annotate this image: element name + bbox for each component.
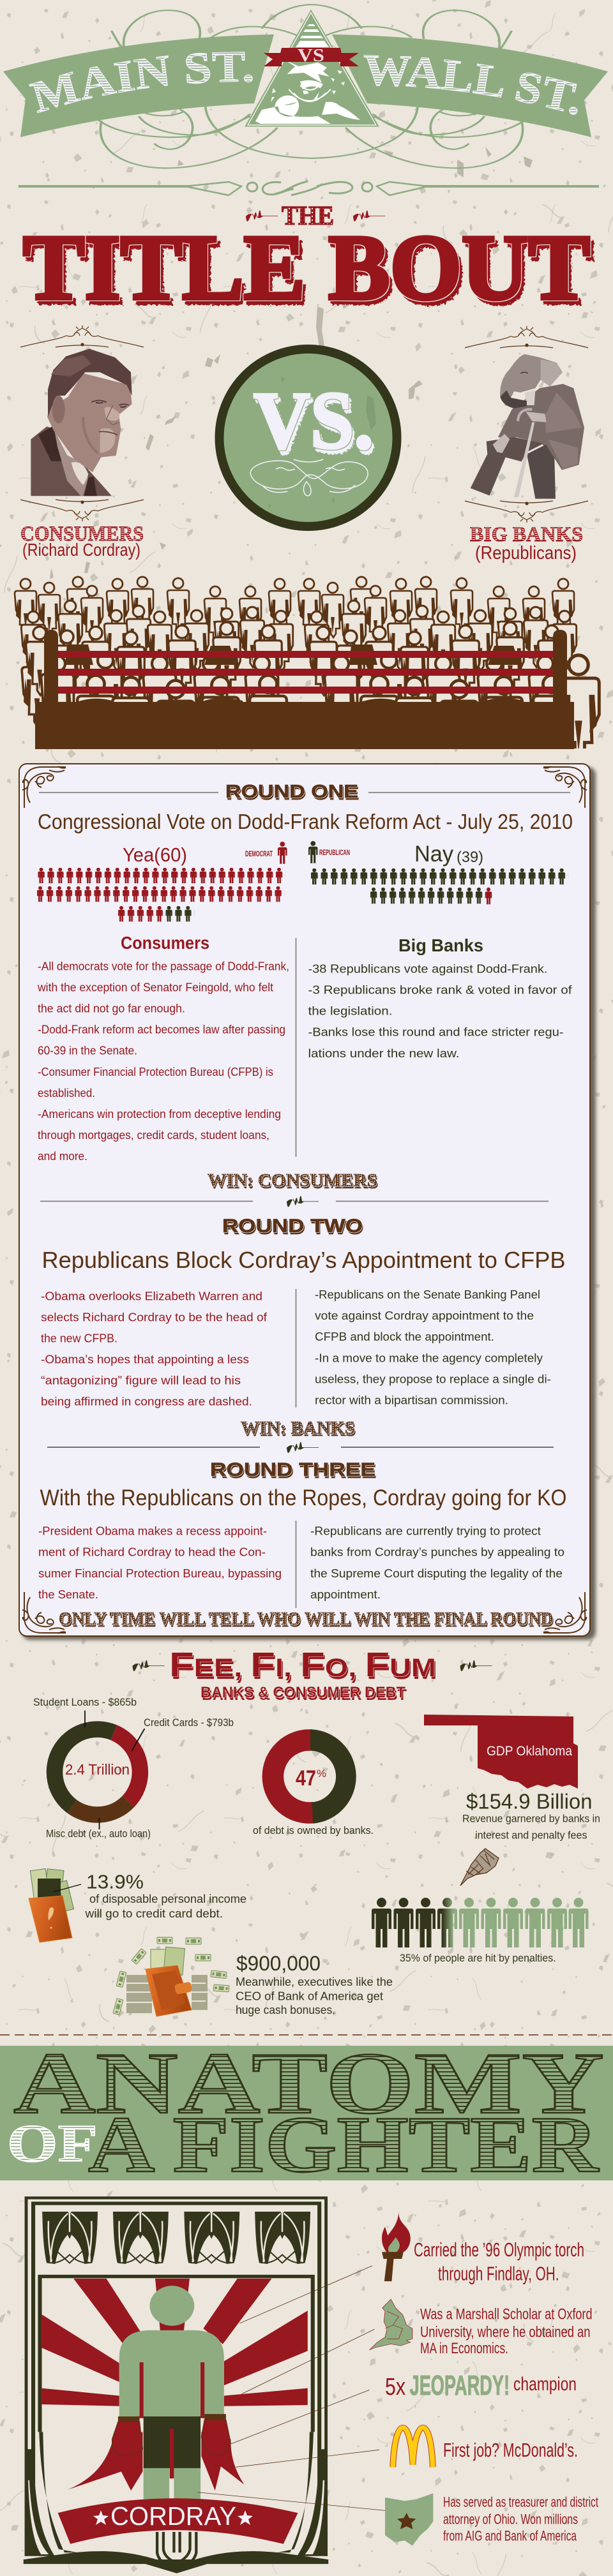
- 13.9 value: 13.9%: [86, 1871, 144, 1893]
- caption: [84, 1893, 246, 1920]
- flourish: [250, 459, 368, 496]
- left ribbon: [3, 34, 274, 137]
- header: Main St. vs Wall St. banner: [3, 4, 608, 168]
- poster frame: [26, 2198, 326, 2556]
- consumers text: selects Richard Cordray to be the head of: [41, 1311, 268, 1323]
- consumers text: being affirmed in congress are dashed.: [41, 1396, 252, 1408]
- revenue caption: interest and penalty fees: [475, 1829, 587, 1842]
- crowd of spectators: [14, 576, 601, 748]
- consumers text: -Obama’s hopes that appointing a less: [41, 1353, 249, 1366]
- consumers text: “antagonizing” figure will lead to his: [41, 1374, 241, 1387]
- oxford text: [420, 2306, 593, 2357]
- republican legend: REPUBLICAN: [319, 848, 350, 857]
- caption: CEO of Bank of America get: [236, 1990, 383, 2003]
- credit cards label: Credit Cards - $793b: [144, 1716, 234, 1729]
- caption: of debt is owned by banks.: [253, 1824, 374, 1836]
- consumers text: [41, 1290, 268, 1408]
- corner ornaments: [22, 766, 587, 1634]
- icon: torch: [382, 2212, 411, 2281]
- red rays: [41, 2279, 308, 2418]
- round three: [38, 1442, 567, 1629]
- percent sign: %: [317, 1768, 326, 1780]
- ornament top: [465, 326, 588, 348]
- win consumers: WIN: CONSUMERS: [208, 1170, 377, 1191]
- donut: 2.4 trillion debt: [33, 1696, 234, 1840]
- fighter: consumers: [20, 325, 144, 560]
- big banks text: -In a move to make the agency completely: [315, 1351, 543, 1364]
- big banks text: CFPB and block the appointment.: [315, 1330, 494, 1343]
- ropes: [58, 651, 553, 694]
- name big banks: BIG BANKS: [470, 523, 583, 546]
- fact: jeopardy: [385, 2370, 577, 2401]
- donut: 47 percent: [253, 1729, 374, 1836]
- oklahoma stat: [424, 1715, 600, 1842]
- leader lines: [197, 2266, 385, 2510]
- round two heading: ROUND TWO: [222, 1216, 363, 1237]
- richard cordray: (Richard Cordray): [22, 540, 140, 560]
- fact: ohio: [385, 2493, 598, 2545]
- consumers text: -Americans win protection from deceptive lending: [38, 1108, 281, 1120]
- consumers text: established.: [38, 1087, 95, 1099]
- consumers text: and more.: [38, 1150, 87, 1163]
- republicans: (Republicans): [475, 543, 577, 563]
- consumers text: [37, 960, 289, 1163]
- ornament top: [20, 325, 144, 347]
- yea count: Yea(60): [123, 844, 187, 866]
- big banks text: useless, they propose to replace a single di-: [315, 1373, 551, 1385]
- jeopardy logo: JEOPARDY!: [410, 2370, 510, 2401]
- panel card: [19, 764, 590, 1636]
- banks and consumer debt: BANKS & CONSUMER DEBT: [201, 1684, 405, 1701]
- consumers text: ment of Richard Cordray to head the Con-: [38, 1546, 266, 1559]
- democrat legend: DEMOCRAT: [245, 849, 273, 858]
- revenue caption: Revenue garnered by banks in: [462, 1813, 600, 1825]
- consumers text: sumer Financial Protection Bureau, bypassing: [38, 1567, 282, 1580]
- round one: [37, 782, 573, 1191]
- cordray name: CORDRAY: [110, 2501, 236, 2531]
- vote title: Congressional Vote on Dodd-Frank Reform Act - July 25, 2010: [38, 810, 573, 833]
- consumers heading: Consumers: [121, 933, 209, 953]
- consumers text: through mortgages, credit cards, student loans,: [38, 1129, 269, 1142]
- wallet with cash: [113, 1937, 229, 2016]
- consumers text: -All democrats vote for the passage of Dodd-Frank,: [38, 960, 289, 973]
- vs medallion: [220, 349, 397, 526]
- torch text: [414, 2238, 584, 2284]
- fact: oxford: [370, 2299, 593, 2357]
- a fighter: A FIGHTER: [88, 2101, 600, 2189]
- ornamental divider: [19, 181, 599, 195]
- cordray banner shape: [58, 2498, 298, 2544]
- anatomy: ANATOMY: [13, 2034, 604, 2132]
- center value: 2.4 Trillion: [65, 1761, 130, 1778]
- ring base: [35, 702, 574, 749]
- pictogram: 35 percent of people: [372, 1898, 589, 1964]
- stat: 13.9 percent: [29, 1869, 246, 1942]
- pyramid with eye: [245, 10, 379, 126]
- consumers text: -Obama overlooks Elizabeth Warren and: [41, 1290, 262, 1302]
- small ornaments: [231, 211, 385, 221]
- fact: olympic torch: [382, 2212, 584, 2284]
- fact: jeopardy: 5x: [385, 2374, 405, 2401]
- panel: three rounds: [19, 764, 596, 1640]
- icon: golden arches: [393, 2427, 433, 2467]
- big banks text: [310, 1525, 564, 1601]
- right ribbon: [332, 34, 608, 137]
- section heading: fee fi fo fum: [117, 1646, 492, 1701]
- 47 value: 47: [296, 1766, 316, 1791]
- wallet with cash: [29, 1869, 81, 1942]
- big banks text: the legislation.: [308, 1005, 392, 1018]
- brown segment: [72, 1801, 128, 1815]
- icon: pointing hand: [460, 1849, 499, 1886]
- consumers text: the Senate.: [38, 1588, 98, 1601]
- yea pictogram: [37, 868, 285, 922]
- ornament bottom: [465, 501, 588, 523]
- ohio text: [443, 2494, 598, 2543]
- icon: map of ohio: [385, 2493, 433, 2545]
- nay count: (39): [457, 849, 483, 866]
- caption: [236, 1976, 393, 2016]
- consumers text: the act did not go far enough.: [38, 1002, 185, 1015]
- round two title: Republicans Block Cordray’s Appointment to CFPB: [42, 1247, 566, 1273]
- student loans label: Student Loans - $865b: [33, 1696, 137, 1708]
- the: THE: [282, 202, 334, 231]
- decorative swirls: [98, 4, 526, 168]
- final round banner: ONLY TIME WILL TELL WHO WILL WIN THE FINAL ROUND: [59, 1609, 553, 1629]
- big banks text: [315, 1288, 551, 1406]
- of: OF: [7, 2114, 98, 2173]
- big banks text: -Banks lose this round and face stricter regu-: [308, 1026, 564, 1039]
- frame flourish: [25, 2432, 328, 2556]
- ornament bottom: [20, 500, 144, 521]
- vs ribbon: VS: [298, 46, 324, 66]
- nay pictogram: [311, 868, 568, 904]
- big banks text: vote against Cordray appointment to the: [315, 1309, 534, 1322]
- win banks: WIN: BANKS: [241, 1418, 355, 1438]
- misc debt label: Misc debt (ex., auto loan): [46, 1828, 151, 1840]
- section banner: anatomy of a fighter: [0, 2034, 613, 2189]
- ring posts: [44, 630, 567, 703]
- name consumers: CONSUMERS: [20, 523, 144, 546]
- 900000 value: $900,000: [236, 1952, 321, 1975]
- round one heading: ROUND ONE: [225, 782, 358, 802]
- big banks text: lations under the new law.: [308, 1047, 460, 1060]
- boxer figure: [112, 2286, 231, 2499]
- big banks text: banks from Cordray’s punches by appealing to: [310, 1546, 564, 1559]
- consumers text: the new CFPB.: [41, 1332, 117, 1345]
- big banks text: -3 Republicans broke rank & voted in favor of: [308, 984, 573, 997]
- caption: huge cash bonuses.: [236, 2004, 335, 2016]
- round two: [40, 1196, 566, 1438]
- panel shadow: [22, 767, 596, 1640]
- consumers text: with the exception of Senator Feingold, who felt: [37, 981, 273, 994]
- big banks text: -Republicans are currently trying to protect: [310, 1525, 541, 1538]
- nay count: [414, 842, 483, 867]
- consumers text: 60-39 in the Senate.: [38, 1045, 137, 1057]
- title: title bout: TITLE BOUT: [23, 216, 590, 319]
- main st text: MAIN ST.: [29, 52, 253, 114]
- big banks heading: Big Banks: [398, 935, 483, 955]
- cape: [67, 2432, 245, 2490]
- caption: of disposable personal income: [89, 1893, 246, 1905]
- portrait: Richard Cordray: [31, 349, 132, 496]
- nay count: Nay: [414, 842, 453, 867]
- poster: boxer cordray: [24, 2198, 385, 2573]
- round three title: With the Republicans on the Ropes, Cordray going for KO: [40, 1485, 567, 1510]
- democrat legend: [245, 842, 287, 864]
- red segment: [114, 1732, 140, 1801]
- big banks text: [308, 963, 573, 1060]
- vs ribbon: [264, 46, 359, 66]
- gdp oklahoma: GDP Oklahoma: [487, 1744, 572, 1759]
- round three heading: ROUND THREE: [210, 1459, 375, 1480]
- big banks text: appointment.: [310, 1588, 381, 1601]
- boxing ring: [35, 630, 574, 749]
- fact: mcdonalds: [393, 2427, 578, 2467]
- consumers text: [38, 1525, 282, 1601]
- the: [231, 202, 385, 231]
- fighter: big banks: [465, 326, 588, 563]
- big banks text: the Supreme Court disputing the legality of the: [310, 1567, 563, 1580]
- bottom bar: [24, 2551, 328, 2573]
- art nouveau ornaments: [42, 2212, 310, 2264]
- consumers text: -Dodd-Frank reform act becomes law after passing: [38, 1024, 285, 1036]
- caption: 35% of people are hit by penalties.: [400, 1952, 556, 1964]
- icon: map of england: [370, 2299, 412, 2350]
- caption: Meanwhile, executives like the: [236, 1976, 393, 1988]
- oxford text: MA in Economics.: [420, 2340, 508, 2357]
- champion: champion: [513, 2374, 577, 2395]
- consumers text: -Consumer Financial Protection Bureau (CFPB) is: [38, 1066, 273, 1078]
- dark segment: [54, 1729, 114, 1806]
- big banks text: rector with a bipartisan commission.: [315, 1394, 508, 1406]
- republican legend: [308, 841, 350, 863]
- vs medallion: VS.: [254, 375, 374, 466]
- revenue caption: [462, 1813, 600, 1842]
- 154.9 billion: $154.9 Billion: [466, 1790, 593, 1813]
- oklahoma map: [424, 1715, 578, 1789]
- stat: 900,000: [113, 1937, 393, 2016]
- elephant in suit: [471, 354, 584, 499]
- big banks text: -38 Republicans vote against Dodd-Frank.: [308, 963, 548, 976]
- big banks text: -Republicans on the Senate Banking Panel: [315, 1288, 540, 1301]
- consumers text: -President Obama makes a recess appoint-: [38, 1525, 267, 1538]
- wall st text: WALL ST.: [364, 55, 577, 115]
- caption: will go to credit card debt.: [84, 1907, 223, 1920]
- fee fi fo fum: FEE, FI, FO, FUM: [169, 1646, 436, 1684]
